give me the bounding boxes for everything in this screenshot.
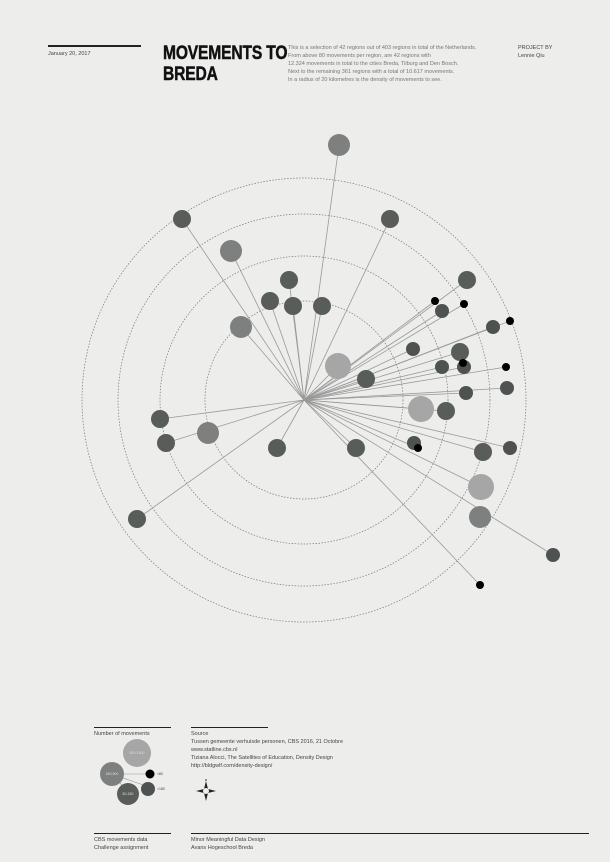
legend: number of movements: <180 [157, 787, 165, 791]
title: MOVEMENTS TO [163, 42, 287, 64]
date block: January 20, 2017 [48, 51, 91, 57]
title [163, 42, 288, 85]
footer right: Avans Hogeschool Breda [191, 845, 253, 851]
legend: number of movements: <80 [157, 772, 163, 776]
source text: Tussen gemeente verhuisde personen, CBS 2016, 21 Octobre [191, 739, 343, 745]
legend: number of movements [94, 727, 171, 805]
description: 12.324 movements in total to the cities Breda, Tilburg and Den Bosch. [288, 61, 458, 67]
footer left [94, 833, 171, 851]
title: BREDA [163, 63, 218, 85]
legend: number of movements: 180-500 [106, 772, 118, 776]
description: From above 80 movements per region, are 42 regions with [288, 53, 431, 59]
project credit: Lennie Qiu [518, 53, 545, 59]
footer right [191, 833, 589, 851]
description: This is a selection of 42 regions out of 403 regions in total of the Netherlands. [288, 45, 476, 51]
footer right: Minor Meaningful Data Design [191, 837, 265, 843]
legend: number of movements: Number of movements [94, 731, 150, 737]
description [288, 45, 476, 83]
source text: Tiziana Alocci, The Satellites of Education, Density Design [191, 755, 333, 761]
legend: number of movements: 500-1500 [130, 751, 144, 755]
footer left: CBS movements data [94, 837, 148, 843]
footer left: Challenge assignment [94, 845, 148, 851]
source text: www.statline.cbs.nl [191, 747, 237, 753]
description: In a radius of 20 kilometres is the density of movements to see. [288, 77, 442, 83]
project credit [518, 45, 552, 59]
description: Next to the remaining 361 regions with a total of 10.617 movements. [288, 69, 454, 75]
source text: Source [191, 731, 208, 737]
icon: compass [196, 779, 216, 801]
source text: http://bldgwlf.com/density-design/ [191, 763, 272, 769]
source text [191, 727, 343, 769]
project credit: PROJECT BY [518, 45, 552, 51]
legend: number of movements: 80-180 [123, 792, 133, 796]
